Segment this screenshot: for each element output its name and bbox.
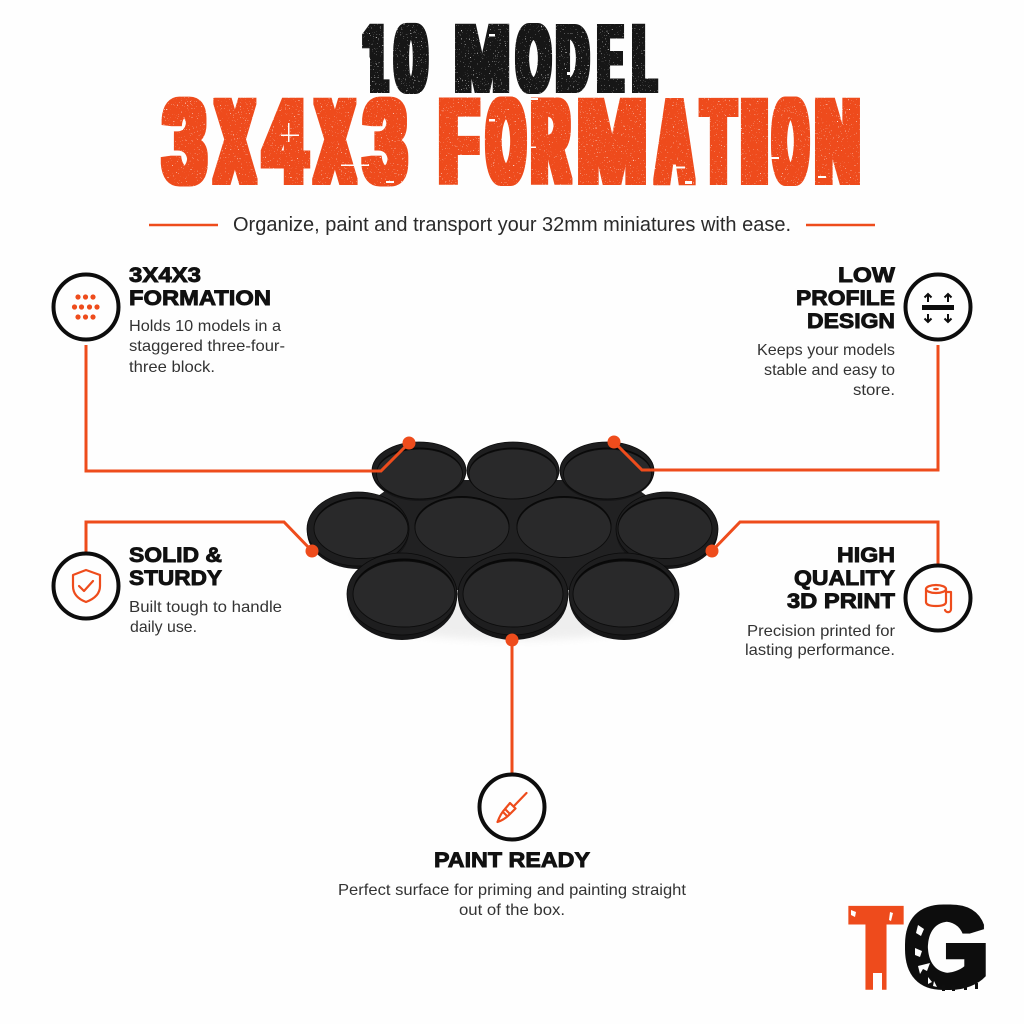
logo: TG: G — [904, 884, 989, 1012]
title line: 3X4X3 FORMATION: O — [488, 76, 524, 208]
title line: 10 MODEL — [358, 6, 655, 112]
middle row wells — [307, 492, 718, 569]
logo: TG — [851, 884, 989, 1012]
description — [757, 342, 895, 399]
description: out of the box. — [459, 902, 565, 919]
description: staggered three-four- — [129, 338, 285, 355]
title line: 10 MODEL: E — [599, 6, 622, 112]
title line: 10 MODEL: 0 — [395, 6, 427, 112]
icon: low profile arrows — [906, 274, 970, 340]
heading — [129, 263, 271, 310]
title line: 3X4X3 FORMATION: X — [217, 76, 253, 208]
description: lasting performance. — [745, 642, 895, 659]
connector: solid and sturdy — [86, 522, 318, 558]
panel: low profile design — [757, 263, 970, 399]
subtitle with side rules: Organize, paint and transport your 32mm miniatures with ease. — [233, 214, 791, 236]
icon: filament spool — [906, 566, 970, 630]
heading: PROFILE — [796, 286, 895, 310]
title line: 10 MODEL: O — [517, 6, 550, 112]
title line: 10 MODEL: 1 — [363, 6, 388, 112]
panel: solid and sturdy — [54, 543, 282, 636]
connector: paint ready — [506, 634, 518, 773]
title line: 3X4X3 FORMATION: X — [317, 76, 353, 208]
title line: 3X4X3 FORMATION: T — [703, 76, 734, 208]
description: stable and easy to — [764, 362, 895, 379]
title line: 10 MODEL: D — [557, 6, 588, 112]
description: Keeps your models — [757, 342, 895, 359]
logo: TG: T — [852, 885, 900, 1011]
heading: FORMATION — [129, 286, 271, 310]
heading: QUALITY — [794, 566, 895, 590]
icon: paint brush — [480, 774, 544, 840]
title line: 3X4X3 FORMATION: 3 — [164, 76, 206, 208]
connector: formation — [86, 345, 416, 471]
title line: 10 MODEL: M — [455, 6, 510, 112]
heading: 3X4X3 — [129, 263, 201, 287]
description: Built tough to handle — [129, 599, 282, 616]
title line: 3X4X3 FORMATION — [164, 76, 859, 208]
title line: 3X4X3 FORMATION: M — [578, 76, 646, 208]
description: daily use. — [130, 619, 197, 636]
description: three block. — [129, 359, 215, 376]
heading — [787, 543, 895, 613]
title line: 3X4X3 FORMATION: 4 — [265, 76, 306, 208]
title line: 3X4X3 FORMATION: N — [816, 76, 859, 208]
icon: shield with check — [54, 554, 118, 618]
panel: paint ready — [338, 774, 687, 919]
back row wells — [372, 442, 654, 501]
title line: 3X4X3 FORMATION: 3 — [364, 76, 406, 208]
title line: 3X4X3 FORMATION: I — [738, 76, 771, 208]
heading: LOW — [838, 263, 896, 287]
infographic canvas: L — [634, 6, 655, 112]
tray base — [345, 480, 680, 590]
title line: 3X4X3 FORMATION: F — [440, 76, 478, 208]
heading — [796, 263, 896, 333]
product image: 10 model movement tray — [307, 442, 718, 640]
title line: 3X4X3 FORMATION: R — [533, 76, 569, 208]
description: store. — [853, 382, 895, 399]
heading — [129, 543, 222, 590]
connector: low profile — [608, 345, 938, 470]
heading: HIGH — [837, 543, 895, 567]
panel: high quality 3D print — [745, 543, 970, 659]
heading: DESIGN — [807, 309, 895, 333]
description: Perfect surface for priming and painting straight — [338, 882, 687, 899]
connector: high quality — [706, 522, 938, 564]
description — [338, 882, 687, 919]
description — [129, 599, 282, 636]
panel: 3X4X3 formation — [54, 263, 285, 376]
title line: 3X4X3 FORMATION: O — [774, 76, 807, 208]
description — [745, 623, 896, 659]
tray shadow — [353, 584, 673, 640]
description: Precision printed for — [747, 623, 896, 640]
title line: 3X4X3 FORMATION: A — [657, 76, 692, 208]
heading: 3D PRINT — [787, 589, 895, 613]
icon: dot formation — [54, 274, 118, 340]
front row wells — [347, 553, 679, 640]
heading: PAINT READY — [434, 848, 590, 872]
heading: STURDY — [129, 566, 222, 590]
description: Holds 10 models in a — [129, 318, 281, 335]
heading: SOLID & — [129, 543, 222, 567]
description — [129, 318, 285, 376]
